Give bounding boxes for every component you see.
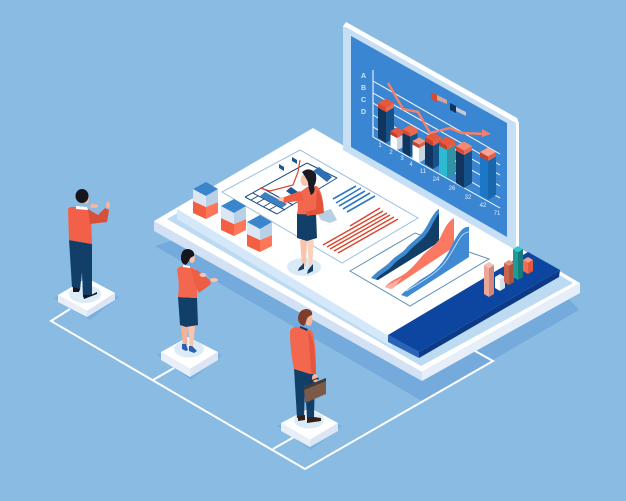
navy wave: [371, 209, 439, 280]
briefcase: [304, 378, 326, 403]
mountain chart panel: [350, 209, 489, 306]
axis numbers: 71: [494, 211, 501, 217]
document panel: [222, 150, 418, 263]
red text lines: [323, 208, 398, 253]
bar 8: [480, 148, 496, 200]
white bar: [495, 274, 505, 291]
bar 2: [390, 128, 404, 150]
trend line arrow: [388, 83, 491, 137]
platform shadow: [155, 200, 579, 401]
axis numbers: 3: [400, 156, 404, 162]
bar 7: [456, 142, 472, 188]
blue text lines: [333, 186, 375, 212]
salmon bar: [523, 257, 533, 274]
brown bar: [504, 260, 514, 285]
mini chart: [245, 157, 337, 214]
screen: [351, 36, 507, 237]
small 3d bars: [484, 246, 533, 297]
axis letters: [361, 73, 366, 116]
teal bar: [513, 246, 523, 280]
connector lines: [51, 309, 493, 469]
axis letters: C: [361, 97, 366, 104]
axis numbers: 2: [389, 150, 393, 156]
navy base slab: [388, 252, 560, 358]
man left: [68, 189, 110, 299]
monitor: [343, 22, 519, 252]
axis numbers: 1: [378, 143, 382, 149]
axis numbers: 4: [409, 162, 413, 168]
axis numbers: 26: [449, 186, 456, 192]
bar 3: [402, 125, 418, 157]
salmon wave: [385, 218, 454, 289]
pedestal 1: [54, 278, 119, 320]
axis letters: D: [361, 109, 366, 116]
cube 2: [221, 199, 246, 236]
legend: [431, 92, 466, 116]
platform: [154, 128, 580, 381]
bar 5: [425, 132, 441, 169]
woman left: [177, 249, 218, 353]
cube 1: [193, 182, 218, 219]
bar 1: [378, 98, 394, 143]
bar 4: [412, 138, 426, 163]
pedestal 3: [277, 408, 342, 450]
axis numbers: 32: [465, 195, 472, 201]
chart grid: [373, 70, 500, 208]
man with briefcase: [290, 309, 326, 423]
axis letters: A: [361, 73, 366, 80]
axis numbers: 42: [480, 203, 487, 209]
axis numbers: [378, 143, 501, 217]
blue wave: [401, 227, 469, 297]
cube 3: [247, 215, 272, 252]
pink bar: [484, 262, 494, 297]
axis numbers: 24: [433, 177, 440, 183]
axis numbers: 11: [420, 169, 427, 175]
bar 6: [439, 136, 455, 178]
presenter woman: [278, 169, 337, 276]
pedestal 2: [157, 337, 222, 380]
axis letters: B: [361, 85, 366, 92]
